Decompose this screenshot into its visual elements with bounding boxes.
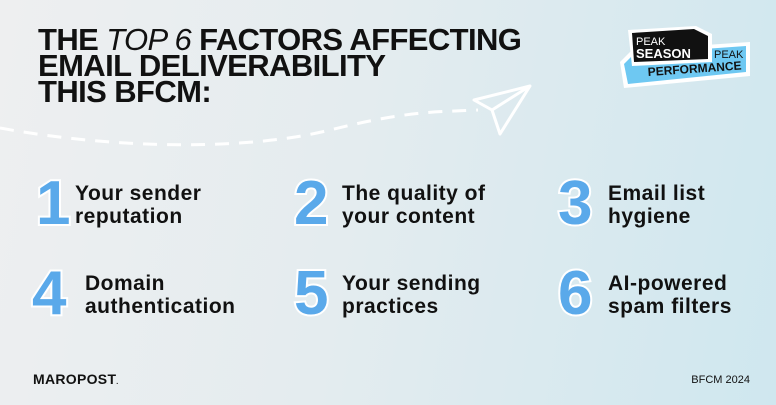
text: 2	[294, 169, 328, 238]
text: 6	[558, 259, 592, 328]
item 5	[294, 259, 481, 328]
title: THIS BFCM:	[38, 74, 211, 109]
text: Your sending	[342, 272, 481, 295]
item 3	[557, 169, 705, 238]
title: EMAIL DELIVERABILITY	[38, 48, 385, 83]
item 1	[36, 169, 201, 238]
text: The quality of	[342, 182, 486, 205]
text: hygiene	[608, 205, 691, 228]
text: AI-powered	[608, 272, 727, 295]
text: 1	[36, 169, 70, 238]
item 2	[294, 169, 486, 238]
badge: peak season peak performance	[620, 26, 750, 88]
text: 3	[558, 169, 592, 238]
title: THE TOP 6 FACTORS AFFECTING	[38, 22, 521, 57]
logo: maropost: MAROPOST.	[33, 371, 119, 387]
text: Domain	[85, 272, 165, 295]
badge: peak season peak performance: PERFORMANCE	[647, 58, 742, 79]
badge: peak season peak performance: PEAK	[714, 49, 744, 61]
text: 4	[32, 259, 66, 328]
text: Email list	[608, 182, 705, 205]
text: practices	[342, 295, 439, 318]
footer: BFCM 2024: BFCM 2024	[691, 374, 750, 386]
item 4	[31, 259, 236, 328]
item 6	[558, 259, 732, 328]
badge: peak season peak performance: SEASON	[636, 46, 691, 61]
badge: peak season peak performance: PEAK	[636, 36, 666, 48]
text: 5	[294, 259, 328, 328]
title	[38, 22, 521, 109]
text: Your sender	[75, 182, 201, 205]
text: spam filters	[608, 295, 732, 318]
text: authentication	[85, 295, 236, 318]
text: reputation	[75, 205, 183, 228]
text: your content	[342, 205, 475, 228]
